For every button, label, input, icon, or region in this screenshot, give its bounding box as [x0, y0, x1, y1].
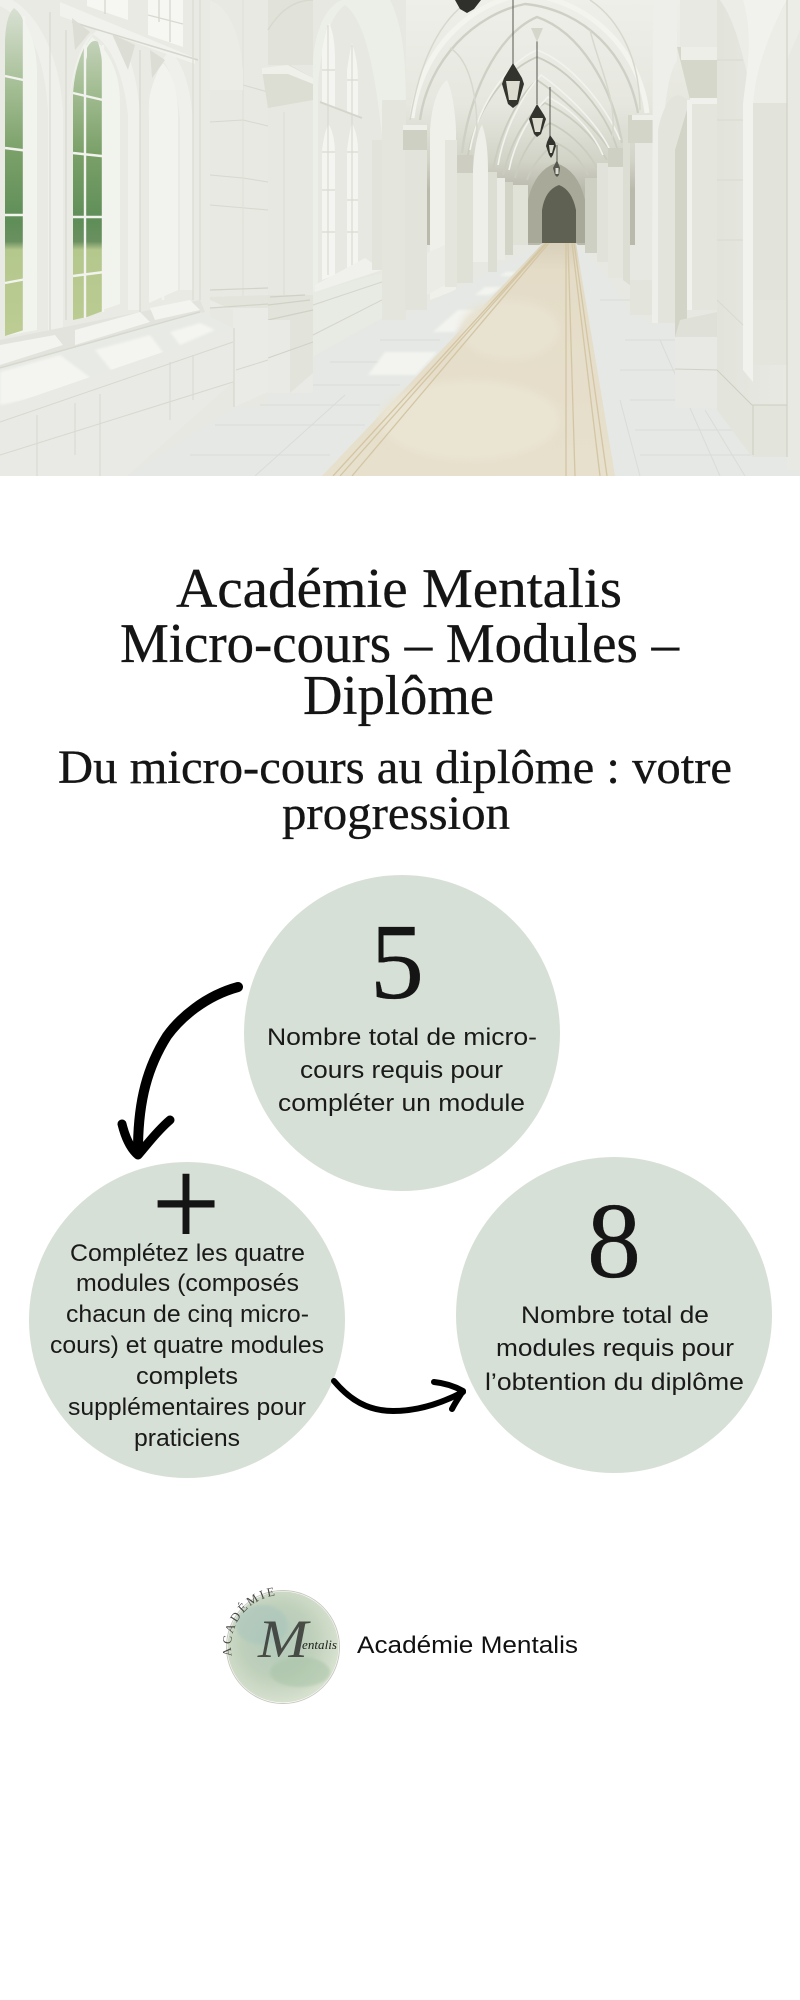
number 5: 5 [370, 903, 424, 1022]
left window bay wall [0, 0, 210, 345]
description: micro-courses: compléter un module [278, 1090, 525, 1117]
carpet runner [322, 243, 615, 476]
description: modules: Complétez les quatre [70, 1240, 305, 1267]
description: modules: praticiens [134, 1425, 240, 1452]
description: diploma: Nombre total de [521, 1302, 709, 1329]
left sill and lower wall [0, 300, 233, 476]
hanging lanterns [455, 0, 560, 177]
circle: additional modules [29, 1134, 345, 1478]
title: Diplôme [303, 665, 494, 727]
receding left piers [403, 125, 528, 310]
logo script M: M [257, 1609, 311, 1669]
left windows glass [5, 0, 183, 336]
description: micro-courses: Nombre total de micro- [267, 1024, 537, 1051]
second bay windows [313, 24, 406, 336]
description: modules: supplémentaires pour [68, 1394, 306, 1421]
circle: total modules [456, 1157, 772, 1473]
end door [528, 163, 585, 243]
floor [190, 243, 750, 476]
plus sign: + [152, 1134, 220, 1274]
description: modules: cours) et quatre modules [50, 1332, 324, 1359]
subtitle [58, 741, 732, 840]
description: diploma [485, 1302, 744, 1396]
left piers and window walls [205, 0, 313, 407]
title: Académie Mentalis [176, 558, 622, 620]
description: modules [50, 1240, 324, 1452]
logo arc text: ACADÉMIE [222, 1588, 274, 1656]
circle: micro-courses count [244, 875, 560, 1191]
right piers and wall [585, 0, 800, 470]
description: diploma: l’obtention du diplôme [485, 1369, 744, 1396]
logo script entalis: entalis [302, 1637, 337, 1652]
description: modules: modules (composés [76, 1270, 299, 1297]
description: modules: complets [136, 1363, 238, 1390]
logo: Académie Mentalis seal [222, 1588, 340, 1704]
arrow: top circle to left circle [122, 987, 238, 1155]
title [120, 558, 680, 727]
number 8: 8 [587, 1182, 641, 1301]
arrow: left circle to right circle [334, 1381, 463, 1411]
description: diploma: modules requis pour [496, 1335, 734, 1362]
description: micro-courses: cours requis pour [300, 1057, 503, 1084]
photo: white gothic corridor [0, 0, 800, 476]
logo wordmark: Académie Mentalis [357, 1632, 578, 1659]
subtitle: progression [282, 787, 510, 840]
ceiling vault with ribs [406, 0, 650, 245]
subtitle: Du micro-cours au diplôme : votre [58, 741, 732, 794]
description: modules: chacun de cinq micro- [66, 1301, 309, 1328]
title: Micro-cours – Modules – [120, 613, 680, 675]
description: micro-courses [267, 1024, 537, 1117]
